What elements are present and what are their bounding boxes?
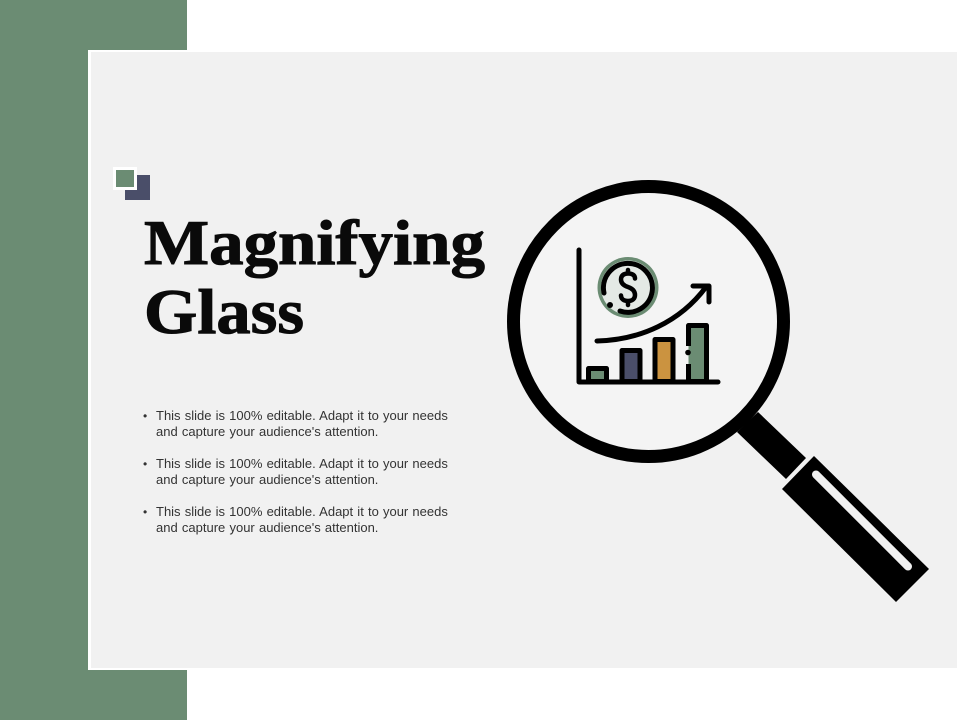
main grey panel [88, 50, 957, 670]
icon: growth chart [579, 250, 718, 382]
title: Magnifying [144, 208, 485, 278]
bullet list [143, 408, 448, 535]
bullet 2: This slide is 100% editable. Adapt it to your needs [156, 456, 448, 471]
trend arrow [597, 286, 709, 341]
glass handle [737, 412, 929, 602]
bars [588, 326, 706, 382]
bullet 3 [143, 504, 448, 535]
title [144, 208, 485, 347]
glass ring [514, 186, 784, 456]
axes [579, 250, 718, 382]
bullet 1: • [143, 409, 147, 423]
bullet 2 [143, 456, 448, 487]
bullet 3: • [143, 505, 147, 519]
bullet 1: This slide is 100% editable. Adapt it to your needs [156, 408, 448, 423]
bullet 3: This slide is 100% editable. Adapt it to your needs [156, 504, 448, 519]
title: Glass [144, 277, 304, 347]
green side band [0, 0, 187, 720]
bullet 2: • [143, 457, 147, 471]
bullet 1 [143, 408, 448, 439]
bullet 3: and capture your audience's attention. [156, 520, 378, 535]
bullet 2: and capture your audience's attention. [156, 472, 378, 487]
bullet 1: and capture your audience's attention. [156, 424, 378, 439]
icon: dollar coin [598, 257, 658, 318]
icon: overlapping squares [113, 167, 150, 200]
